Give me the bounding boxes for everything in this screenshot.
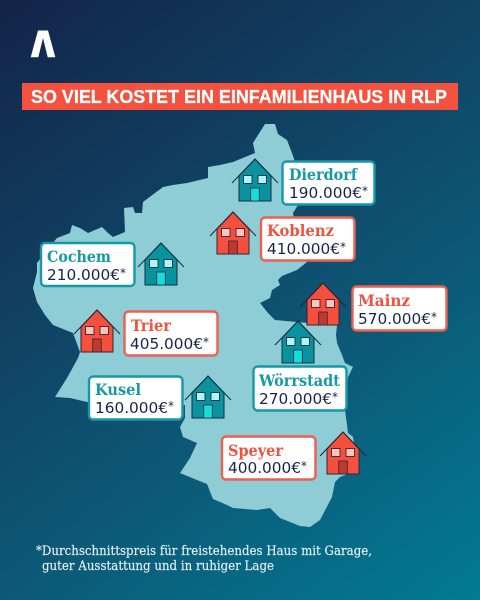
house: Kusel [185, 376, 231, 418]
label: Koblenz [261, 218, 354, 260]
label: Kusel: Kusel [95, 380, 141, 399]
footnote: *Durchschnittspreis für freistehendes Haus mit Garage, [36, 544, 372, 559]
label: Mainz [352, 286, 446, 330]
label: Wörrstadt: * [332, 390, 338, 404]
label: Mainz: * [431, 310, 437, 324]
label: Wörrstadt [254, 366, 346, 410]
label: Mainz: 570.000€ [358, 310, 431, 328]
map: Rheinland-Pfalz [33, 124, 358, 527]
label: Speyer: * [301, 459, 307, 473]
label: Dierdorf: 190.000€ [289, 184, 362, 202]
label: Mainz: Mainz [358, 291, 410, 310]
label: Dierdorf: Dierdorf [289, 165, 358, 184]
label: Trier: 405.000€ [130, 335, 203, 353]
house: Koblenz [210, 212, 256, 254]
label: Koblenz: 410.000€ [267, 240, 340, 258]
house: Cochem [138, 243, 184, 285]
label: Trier: Trier [131, 316, 172, 335]
label: Cochem [41, 243, 134, 286]
label: Kusel: 160.000€ [95, 399, 168, 417]
label: Kusel [89, 376, 182, 420]
label: Trier [124, 312, 218, 356]
label: Speyer [222, 436, 316, 480]
label: Speyer: 400.000€ [228, 459, 301, 477]
label: Koblenz: * [340, 240, 346, 254]
house: Wörrstadt [275, 321, 321, 363]
label: Dierdorf: * [362, 184, 368, 198]
house: Dierdorf [232, 159, 278, 201]
house: Mainz [300, 283, 346, 325]
label: Wörrstadt: Wörrstadt [258, 371, 341, 390]
label: Dierdorf [282, 162, 374, 204]
footnote [36, 544, 372, 574]
label: Koblenz: Koblenz [267, 221, 334, 240]
label: Cochem: * [120, 266, 126, 280]
label: Cochem: 210.000€ [47, 266, 120, 284]
house: Speyer [320, 432, 366, 474]
house: Trier [74, 310, 120, 352]
label: Kusel: * [168, 399, 174, 413]
label: Wörrstadt: 270.000€ [259, 390, 332, 408]
footnote: guter Ausstattung und in ruhiger Lage [42, 559, 274, 574]
title banner: SO VIEL KOSTET EIN EINFAMILIENHAUS IN RLP [31, 86, 447, 107]
icon: logo [31, 30, 55, 57]
label: Speyer: Speyer [228, 441, 284, 460]
label: Cochem: Cochem [47, 247, 112, 266]
label: Trier: * [203, 335, 209, 349]
